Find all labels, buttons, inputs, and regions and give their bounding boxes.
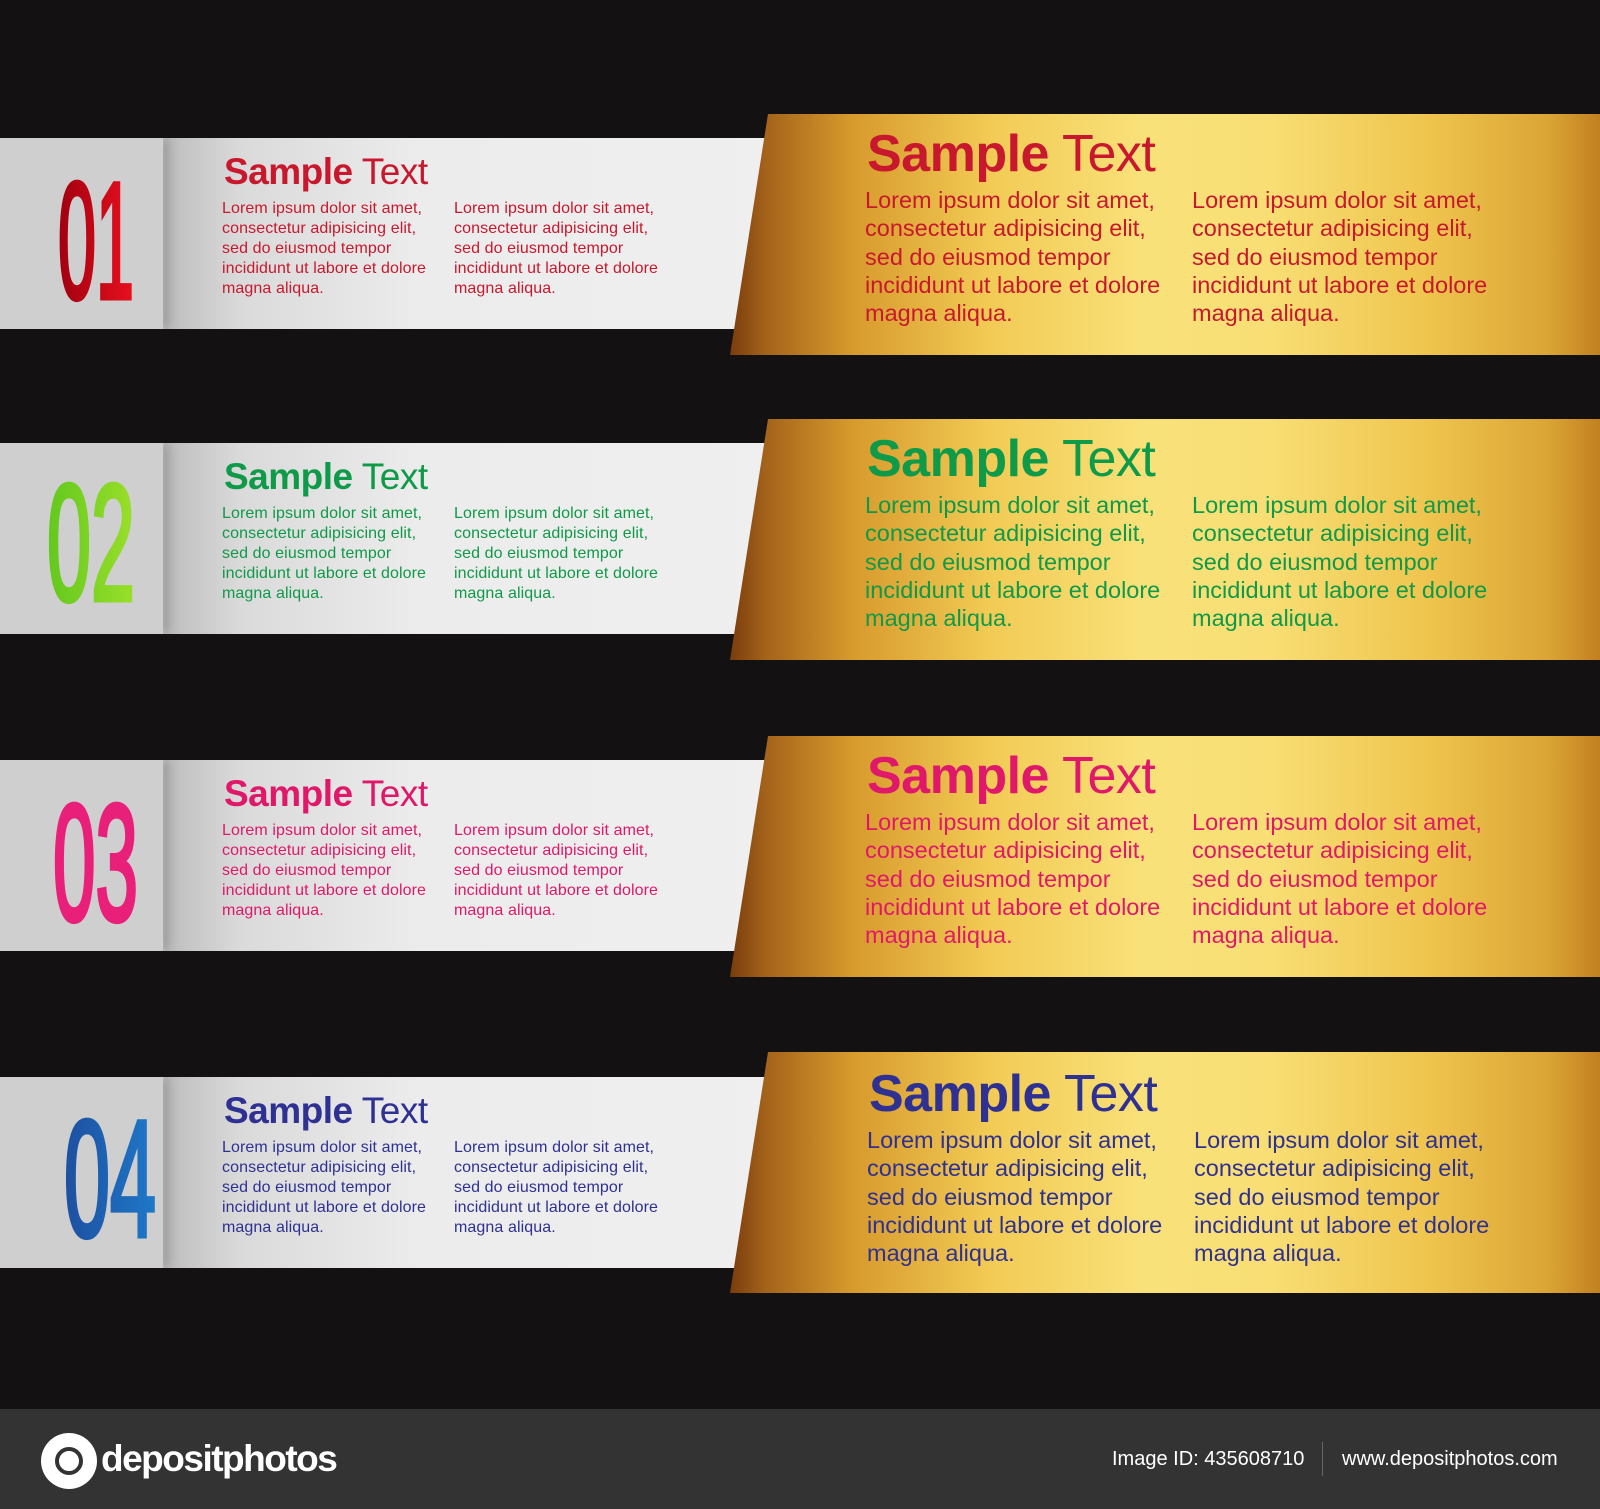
title: Sample Text: [224, 773, 428, 814]
text column: [866, 496, 1160, 631]
panel: white band 02: [0, 443, 770, 634]
text column: incididunt ut labore et dolore: [1192, 577, 1487, 603]
text column: incididunt ut labore et dolore: [222, 882, 426, 899]
text column: incididunt ut labore et dolore: [1192, 894, 1487, 920]
text column: magna aliqua.: [1192, 922, 1340, 948]
text column: magna aliqua.: [1192, 605, 1340, 631]
text column: [1192, 813, 1486, 948]
text column: sed do eiusmod tempor: [865, 244, 1111, 270]
text column: [1192, 191, 1486, 326]
text column: sed do eiusmod tempor: [454, 545, 623, 562]
text column: sed do eiusmod tempor: [222, 240, 391, 257]
text column: [866, 191, 1160, 326]
text column: [222, 824, 426, 918]
text column: [222, 506, 426, 602]
text column: incididunt ut labore et dolore: [1192, 272, 1487, 298]
website: www.depositphotos.com: [1342, 1448, 1558, 1470]
panel: gold 04: [730, 1052, 1600, 1293]
title: Sample Text: [869, 1065, 1157, 1123]
text column: magna aliqua.: [222, 280, 324, 297]
text column: consectetur adipisicing elit,: [222, 1159, 416, 1176]
row 1: [0, 114, 1600, 355]
text column: incididunt ut labore et dolore: [865, 894, 1160, 920]
text column: sed do eiusmod tempor: [222, 1179, 391, 1196]
row 3: [0, 736, 1600, 977]
text column: consectetur adipisicing elit,: [454, 525, 648, 542]
panel: white band 01: [0, 138, 770, 329]
text column: Lorem ipsum dolor sit amet,: [867, 1127, 1157, 1153]
text column: incididunt ut labore et dolore: [865, 272, 1160, 298]
text column: magna aliqua.: [865, 300, 1013, 326]
text column: sed do eiusmod tempor: [454, 1179, 623, 1196]
text column: sed do eiusmod tempor: [865, 549, 1111, 575]
text column: sed do eiusmod tempor: [454, 862, 623, 879]
title: Sample Text: [224, 151, 428, 192]
text column: [222, 1140, 426, 1236]
text column: magna aliqua.: [865, 605, 1013, 631]
text column: consectetur adipisicing elit,: [454, 220, 648, 237]
text column: Lorem ipsum dolor sit amet,: [454, 1139, 654, 1156]
text column: incididunt ut labore et dolore: [867, 1212, 1162, 1238]
text column: incididunt ut labore et dolore: [1194, 1212, 1489, 1238]
title: Sample Text: [867, 430, 1155, 488]
text column: [454, 1140, 658, 1236]
text column: magna aliqua.: [1194, 1240, 1342, 1266]
row 2: [0, 419, 1600, 660]
text column: sed do eiusmod tempor: [1194, 1184, 1440, 1210]
text column: Lorem ipsum dolor sit amet,: [865, 187, 1155, 213]
text column: consectetur adipisicing elit,: [454, 842, 648, 859]
image id: Image ID: 435608710: [1112, 1448, 1304, 1470]
panel: gold 01: [730, 114, 1600, 355]
text column: magna aliqua.: [454, 902, 556, 919]
text column: magna aliqua.: [222, 1219, 324, 1236]
text column: Lorem ipsum dolor sit amet,: [1192, 187, 1482, 213]
text column: consectetur adipisicing elit,: [454, 1159, 648, 1176]
text column: magna aliqua.: [454, 585, 556, 602]
text column: incididunt ut labore et dolore: [454, 882, 658, 899]
text column: sed do eiusmod tempor: [1192, 244, 1438, 270]
text column: consectetur adipisicing elit,: [1192, 520, 1473, 546]
text column: sed do eiusmod tempor: [222, 545, 391, 562]
text column: [866, 813, 1160, 948]
text column: magna aliqua.: [222, 902, 324, 919]
text column: magna aliqua.: [222, 585, 324, 602]
row 4: [0, 1052, 1600, 1293]
panel: white band 04: [0, 1077, 770, 1268]
text column: sed do eiusmod tempor: [867, 1184, 1113, 1210]
text column: sed do eiusmod tempor: [1192, 549, 1438, 575]
title: Sample Text: [867, 125, 1155, 183]
text column: Lorem ipsum dolor sit amet,: [222, 505, 422, 522]
text column: consectetur adipisicing elit,: [222, 220, 416, 237]
text column: consectetur adipisicing elit,: [865, 520, 1146, 546]
text column: Lorem ipsum dolor sit amet,: [454, 200, 654, 217]
text column: magna aliqua.: [454, 280, 556, 297]
text column: incididunt ut labore et dolore: [865, 577, 1160, 603]
text column: consectetur adipisicing elit,: [1192, 215, 1473, 241]
text column: Lorem ipsum dolor sit amet,: [865, 809, 1155, 835]
text column: consectetur adipisicing elit,: [222, 525, 416, 542]
text column: [454, 824, 658, 918]
text column: consectetur adipisicing elit,: [1194, 1155, 1475, 1181]
text column: sed do eiusmod tempor: [222, 862, 391, 879]
text column: [1194, 1131, 1488, 1266]
text column: magna aliqua.: [454, 1219, 556, 1236]
text column: consectetur adipisicing elit,: [1192, 837, 1473, 863]
text column: consectetur adipisicing elit,: [867, 1155, 1148, 1181]
text column: Lorem ipsum dolor sit amet,: [222, 822, 422, 839]
text column: [1192, 496, 1486, 631]
title: Sample Text: [224, 456, 428, 497]
text column: [868, 1131, 1162, 1266]
panel: gold 02: [730, 419, 1600, 660]
title: Sample Text: [867, 747, 1155, 805]
text column: incididunt ut labore et dolore: [222, 260, 426, 277]
text column: incididunt ut labore et dolore: [454, 260, 658, 277]
text column: Lorem ipsum dolor sit amet,: [454, 505, 654, 522]
text column: incididunt ut labore et dolore: [454, 1199, 658, 1216]
text column: incididunt ut labore et dolore: [222, 565, 426, 582]
panel: white band 03: [0, 760, 770, 951]
panel: gold 03: [730, 736, 1600, 977]
title: Sample Text: [224, 1090, 428, 1131]
text column: incididunt ut labore et dolore: [222, 1199, 426, 1216]
text column: consectetur adipisicing elit,: [865, 837, 1146, 863]
text column: Lorem ipsum dolor sit amet,: [865, 492, 1155, 518]
text column: Lorem ipsum dolor sit amet,: [1192, 492, 1482, 518]
text column: [454, 506, 658, 602]
text column: magna aliqua.: [867, 1240, 1015, 1266]
text column: consectetur adipisicing elit,: [865, 215, 1146, 241]
text column: [222, 202, 426, 296]
text column: magna aliqua.: [865, 922, 1013, 948]
text column: Lorem ipsum dolor sit amet,: [1192, 809, 1482, 835]
text column: magna aliqua.: [1192, 300, 1340, 326]
text column: sed do eiusmod tempor: [1192, 866, 1438, 892]
text column: sed do eiusmod tempor: [865, 866, 1111, 892]
text column: Lorem ipsum dolor sit amet,: [1194, 1127, 1484, 1153]
text column: Lorem ipsum dolor sit amet,: [454, 822, 654, 839]
logo text: depositphotos: [101, 1438, 336, 1479]
text column: Lorem ipsum dolor sit amet,: [222, 1139, 422, 1156]
text column: [454, 202, 658, 296]
icon: camera logo: [41, 1433, 97, 1489]
text column: Lorem ipsum dolor sit amet,: [222, 200, 422, 217]
footer bar: [0, 1409, 1600, 1509]
text column: sed do eiusmod tempor: [454, 240, 623, 257]
text column: consectetur adipisicing elit,: [222, 842, 416, 859]
text column: incididunt ut labore et dolore: [454, 565, 658, 582]
